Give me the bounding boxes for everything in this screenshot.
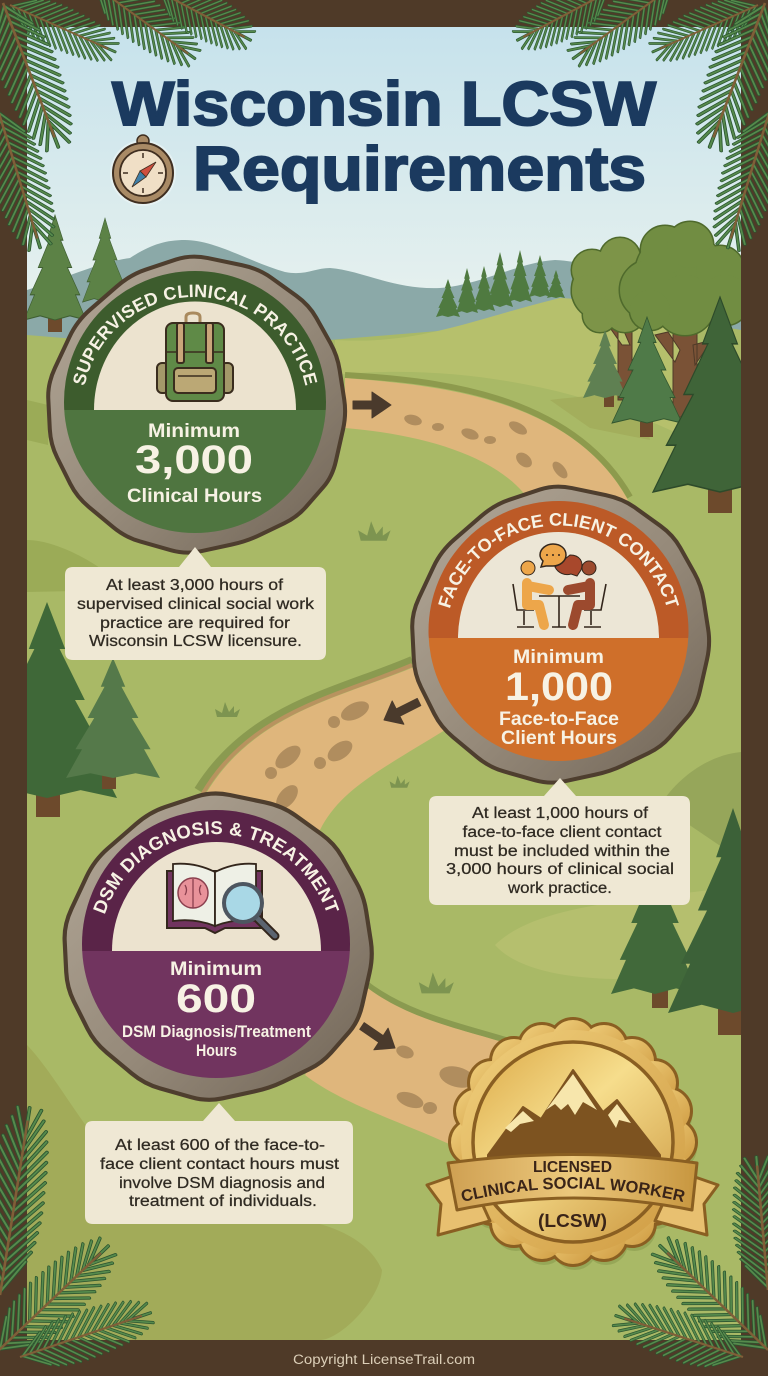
- callout: DSM: treatment of individuals.: [129, 1193, 317, 1210]
- badge stat: Clinical Hours: [127, 486, 262, 507]
- mountain: [487, 1069, 661, 1158]
- icon: backpack: [157, 313, 233, 401]
- pines, right side: [583, 297, 768, 513]
- badge stat: DSM Diagnosis/Treatment: [122, 1022, 311, 1041]
- darker grass patches: [27, 540, 125, 592]
- icon: two people talking: [513, 544, 606, 627]
- badge face: [425, 500, 695, 763]
- deciduous trees: [572, 222, 750, 417]
- ribbon band: [448, 1154, 697, 1210]
- callout: face-to-face: At least 1,000 hours of: [472, 805, 649, 822]
- callout: DSM: involve DSM diagnosis and: [119, 1175, 325, 1192]
- arrow: to licence seal: [360, 1023, 395, 1050]
- seal text: abbreviation: (LCSW): [538, 1211, 607, 1231]
- pine branches, top left: [0, 0, 261, 256]
- stone ring: [65, 793, 372, 1100]
- callout: face-to-face: face-to-face client contact: [462, 824, 662, 841]
- badge stat: [499, 647, 619, 749]
- title line 2: Requirements: [193, 135, 646, 204]
- badge heading: DSM DIAGNOSIS & TREATMENT: [93, 821, 340, 914]
- trail, lower section: [305, 983, 515, 1160]
- panel: supervised clinical practice badge: [46, 254, 348, 555]
- badge stat: Minimum: [513, 647, 604, 668]
- pine branches, top right: [507, 0, 768, 256]
- badge stat: 3,000: [135, 438, 253, 482]
- grass tufts: [215, 521, 454, 993]
- badge face: [60, 270, 330, 535]
- title line 1: Wisconsin LCSW: [112, 70, 657, 139]
- footprints: [265, 413, 570, 1114]
- callout: supervised practice: [65, 547, 326, 660]
- callout: face-to-face: work practice.: [507, 880, 612, 897]
- badge stat: 1,000: [505, 665, 613, 709]
- seal text: licensed: LICENSED: [533, 1159, 612, 1176]
- callout: supervised practice: supervised clinical social work: [77, 596, 314, 613]
- arrow: to DSM stage: [384, 698, 421, 724]
- callout: supervised practice: At least 3,000 hours of: [106, 577, 284, 594]
- badge stat: Face-to-Face: [499, 709, 619, 730]
- badge stat: Client Hours: [501, 728, 617, 749]
- callout: face-to-face: [429, 778, 690, 905]
- callout: DSM: [85, 1103, 353, 1224]
- seal face: [451, 1020, 695, 1264]
- seal shadow: [453, 1026, 697, 1270]
- trail, middle section: [198, 660, 445, 830]
- badge stat: Minimum: [170, 959, 262, 980]
- badge stat: 600: [176, 977, 256, 1021]
- trail, upper section: [345, 375, 630, 510]
- pines, top left: [24, 215, 128, 332]
- callout: supervised practice: Wisconsin LCSW licensure.: [89, 633, 302, 650]
- grass base: [27, 298, 741, 1340]
- icon: compass: [110, 135, 176, 206]
- stone ring: [48, 257, 345, 553]
- pine branches, bottom right: [608, 1154, 768, 1376]
- badge stat: [127, 421, 262, 507]
- badge stat: [122, 959, 311, 1060]
- seal text: clinical social worker: CLINICAL SOCIAL WORKER: [462, 1177, 684, 1202]
- title: [112, 70, 657, 204]
- badge stat: Minimum: [148, 421, 240, 442]
- footer copyright: Copyright LicenseTrail.com: [293, 1352, 475, 1367]
- far pine row: [436, 250, 565, 317]
- panel: face-to-face client contact badge: [410, 484, 712, 785]
- badge heading: SUPERVISED CLINICAL PRACTICE: [73, 284, 318, 386]
- callout: DSM: face client contact hours must: [100, 1156, 340, 1173]
- badge heading: FACE-TO-FACE CLIENT CONTACT: [438, 513, 679, 608]
- distant mountains: [27, 240, 741, 380]
- icon: LCSW gold seal: [426, 1017, 720, 1270]
- panel: DSM diagnosis and treatment badge: [62, 791, 374, 1102]
- callout: face-to-face: 3,000 hours of clinical social: [446, 861, 674, 878]
- pines, lower right: [611, 808, 768, 1035]
- badge face: [78, 808, 356, 1079]
- sky: [27, 27, 741, 327]
- badge stat: Hours: [196, 1041, 237, 1060]
- callout: supervised practice: practice are required for: [100, 615, 290, 632]
- pines, mid left: [0, 602, 160, 817]
- ribbon tails: [427, 1177, 490, 1235]
- icon: book, brain and magnifier: [167, 864, 275, 936]
- seal scalloped edge: [451, 1020, 695, 1264]
- seal inner disc: [473, 1042, 673, 1242]
- light back hill: [335, 298, 741, 470]
- callout: face-to-face: must be included within the: [454, 843, 670, 860]
- arrow: to face-to-face stage: [353, 392, 391, 418]
- callout: DSM: At least 600 of the face-to-: [115, 1137, 325, 1154]
- pine branches, bottom left: [0, 1103, 158, 1376]
- stone ring: [412, 487, 709, 783]
